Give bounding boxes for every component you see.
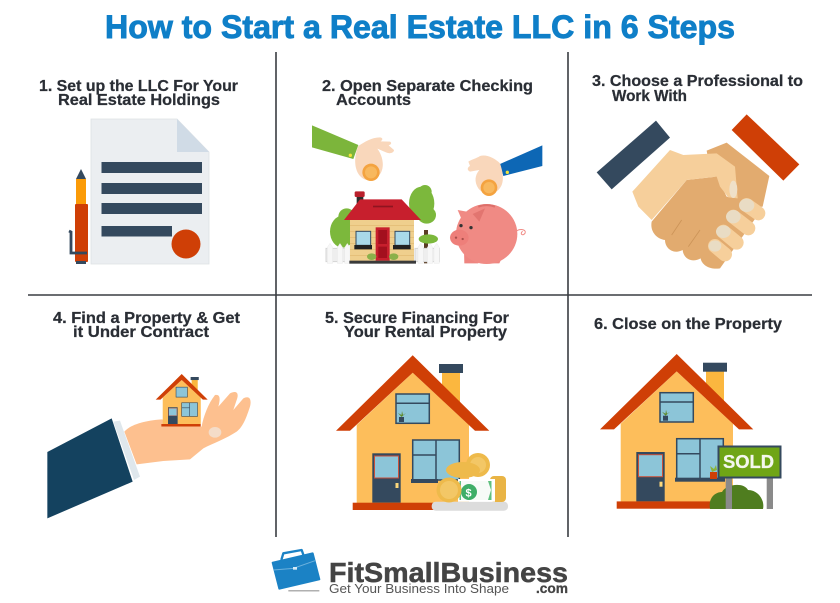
icon: pen — [69, 169, 88, 264]
illustration: hands, house and piggy bank — [312, 125, 542, 264]
heading: step 3 — [592, 73, 803, 105]
heading: step 3: Work With — [612, 88, 687, 105]
heading: step 1 — [39, 78, 238, 109]
icon: house — [600, 354, 753, 509]
icon: sold sign and bush: SOLD — [723, 452, 774, 472]
heading: step 4: 4. Find a Property & Get — [53, 310, 240, 327]
heading: step 3: 3. Choose a Professional to — [592, 73, 803, 90]
icon: handshake — [597, 114, 799, 269]
heading: step 1: 1. Set up the LLC For Your — [39, 78, 238, 95]
title: How to Start a Real Estate LLC in 6 Steps — [105, 9, 735, 45]
panel: step 5 — [325, 310, 509, 511]
icon: document — [91, 119, 209, 264]
panel: step 6 — [594, 316, 782, 509]
panel: step 4 — [47, 310, 251, 518]
heading: step 5: Your Rental Property — [344, 324, 507, 341]
domain: .com — [536, 581, 568, 596]
logo: Fit Small Business — [273, 550, 568, 596]
heading: step 2: Accounts — [336, 92, 411, 109]
panel: step 1 — [39, 78, 238, 264]
icon: hand holding house — [47, 374, 251, 518]
icon: house with trees — [326, 185, 439, 264]
panel: step 2 — [312, 78, 542, 264]
heading: step 4 — [53, 310, 240, 341]
heading: step 2: 2. Open Separate Checking — [322, 78, 533, 95]
heading: step 1: Real Estate Holdings — [58, 92, 220, 109]
icon: small house — [156, 374, 208, 426]
heading: step 6: 6. Close on the Property — [594, 316, 782, 333]
icon: money pile: $ — [466, 488, 472, 500]
heading: step 5: 5. Secure Financing For — [325, 310, 509, 327]
icon: money pile — [432, 453, 508, 511]
panel: step 3 — [592, 73, 803, 269]
icon: briefcase — [273, 550, 319, 591]
icon: piggy bank — [450, 204, 525, 264]
icon: house — [336, 355, 489, 510]
icon: left hand with coin — [312, 125, 394, 181]
icon: right hand with coin — [468, 145, 542, 196]
icon: sold sign and bush — [710, 446, 780, 509]
wordmark: FitSmallBusiness — [329, 557, 568, 588]
heading: step 4: it Under Contract — [73, 324, 209, 341]
tagline: Get Your Business Into Shape — [329, 581, 509, 596]
heading: step 2 — [322, 78, 533, 109]
heading: step 5 — [325, 310, 509, 341]
